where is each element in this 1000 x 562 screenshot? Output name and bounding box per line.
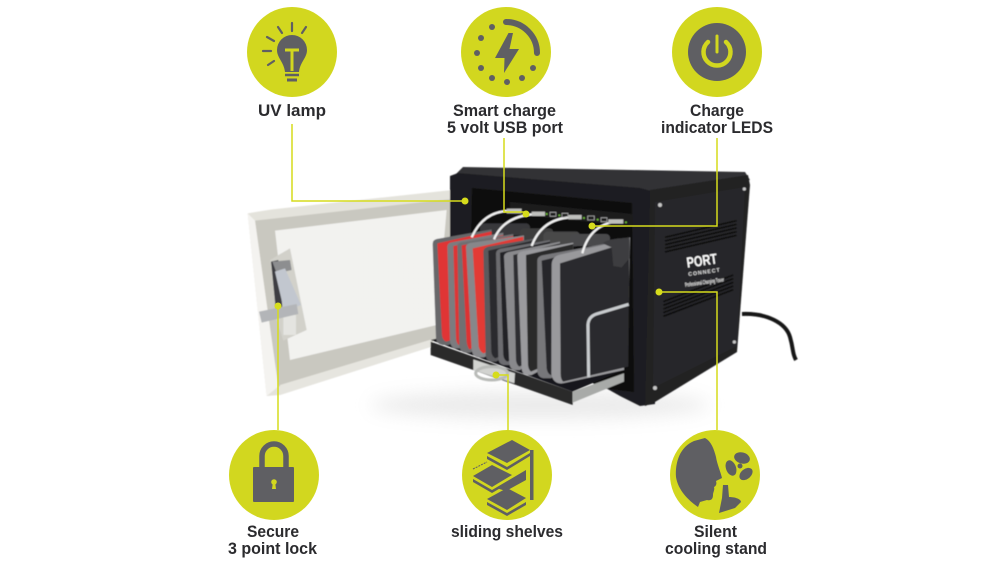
front tablet — [551, 237, 630, 383]
callout: smart charge leader — [504, 138, 530, 218]
callout: cooling leader — [656, 288, 717, 430]
brand logo — [681, 251, 725, 289]
side vents and brand logo — [653, 187, 746, 390]
label: secure lock: Secure — [247, 522, 299, 541]
red tablet 2 — [447, 233, 503, 348]
icon: padlock — [229, 430, 319, 520]
floor shadow — [370, 391, 710, 419]
charging cables — [472, 211, 620, 253]
USB plugs — [507, 209, 623, 224]
callout: UV lamp leader — [292, 124, 468, 204]
red tablet 3 — [457, 234, 513, 353]
label: silent cooling: Silent — [694, 522, 737, 541]
label: UV lamp: UV lamp — [258, 101, 326, 120]
callout: charge LED leader — [588, 138, 717, 230]
icon: UV lamp — [247, 7, 337, 97]
product photo: open charging cabinet — [248, 167, 796, 406]
red tablet 4 — [466, 235, 524, 357]
label: silent cooling: cooling stand — [665, 539, 767, 558]
label: secure lock: 3 point lock — [228, 539, 318, 558]
label: smart charge: 5 volt USB port — [447, 118, 563, 137]
dark tablets — [483, 238, 607, 378]
red tablet 1 — [433, 229, 492, 345]
wire divider — [588, 304, 629, 377]
icon: silent fan and face — [670, 430, 760, 520]
sliding tray — [431, 333, 624, 405]
brand logo: CONNECT — [688, 268, 721, 278]
open door with mesh and lock — [248, 189, 471, 396]
tablet handles — [480, 223, 610, 246]
label: sliding shelves: sliding shelves — [451, 522, 563, 541]
side vents and brand logo: Professional Charging Tower — [685, 277, 725, 289]
label: charge indicator: Charge — [690, 101, 744, 120]
icon: power indicator — [672, 7, 762, 97]
icon: smart charge — [461, 7, 551, 97]
USB ports and LEDs — [546, 212, 627, 223]
label: charge indicator: indicator LEDS — [661, 118, 773, 137]
cord — [742, 314, 796, 360]
shelf with tablets, cables and rail — [431, 209, 630, 405]
cabinet body — [450, 167, 750, 406]
callout: lock leader — [274, 302, 282, 430]
label: smart charge: Smart charge — [453, 101, 556, 120]
icon: sliding shelves — [462, 430, 552, 520]
callout: shelves leader — [492, 372, 508, 430]
brand logo: PORT — [686, 252, 718, 272]
door lock — [259, 248, 307, 341]
